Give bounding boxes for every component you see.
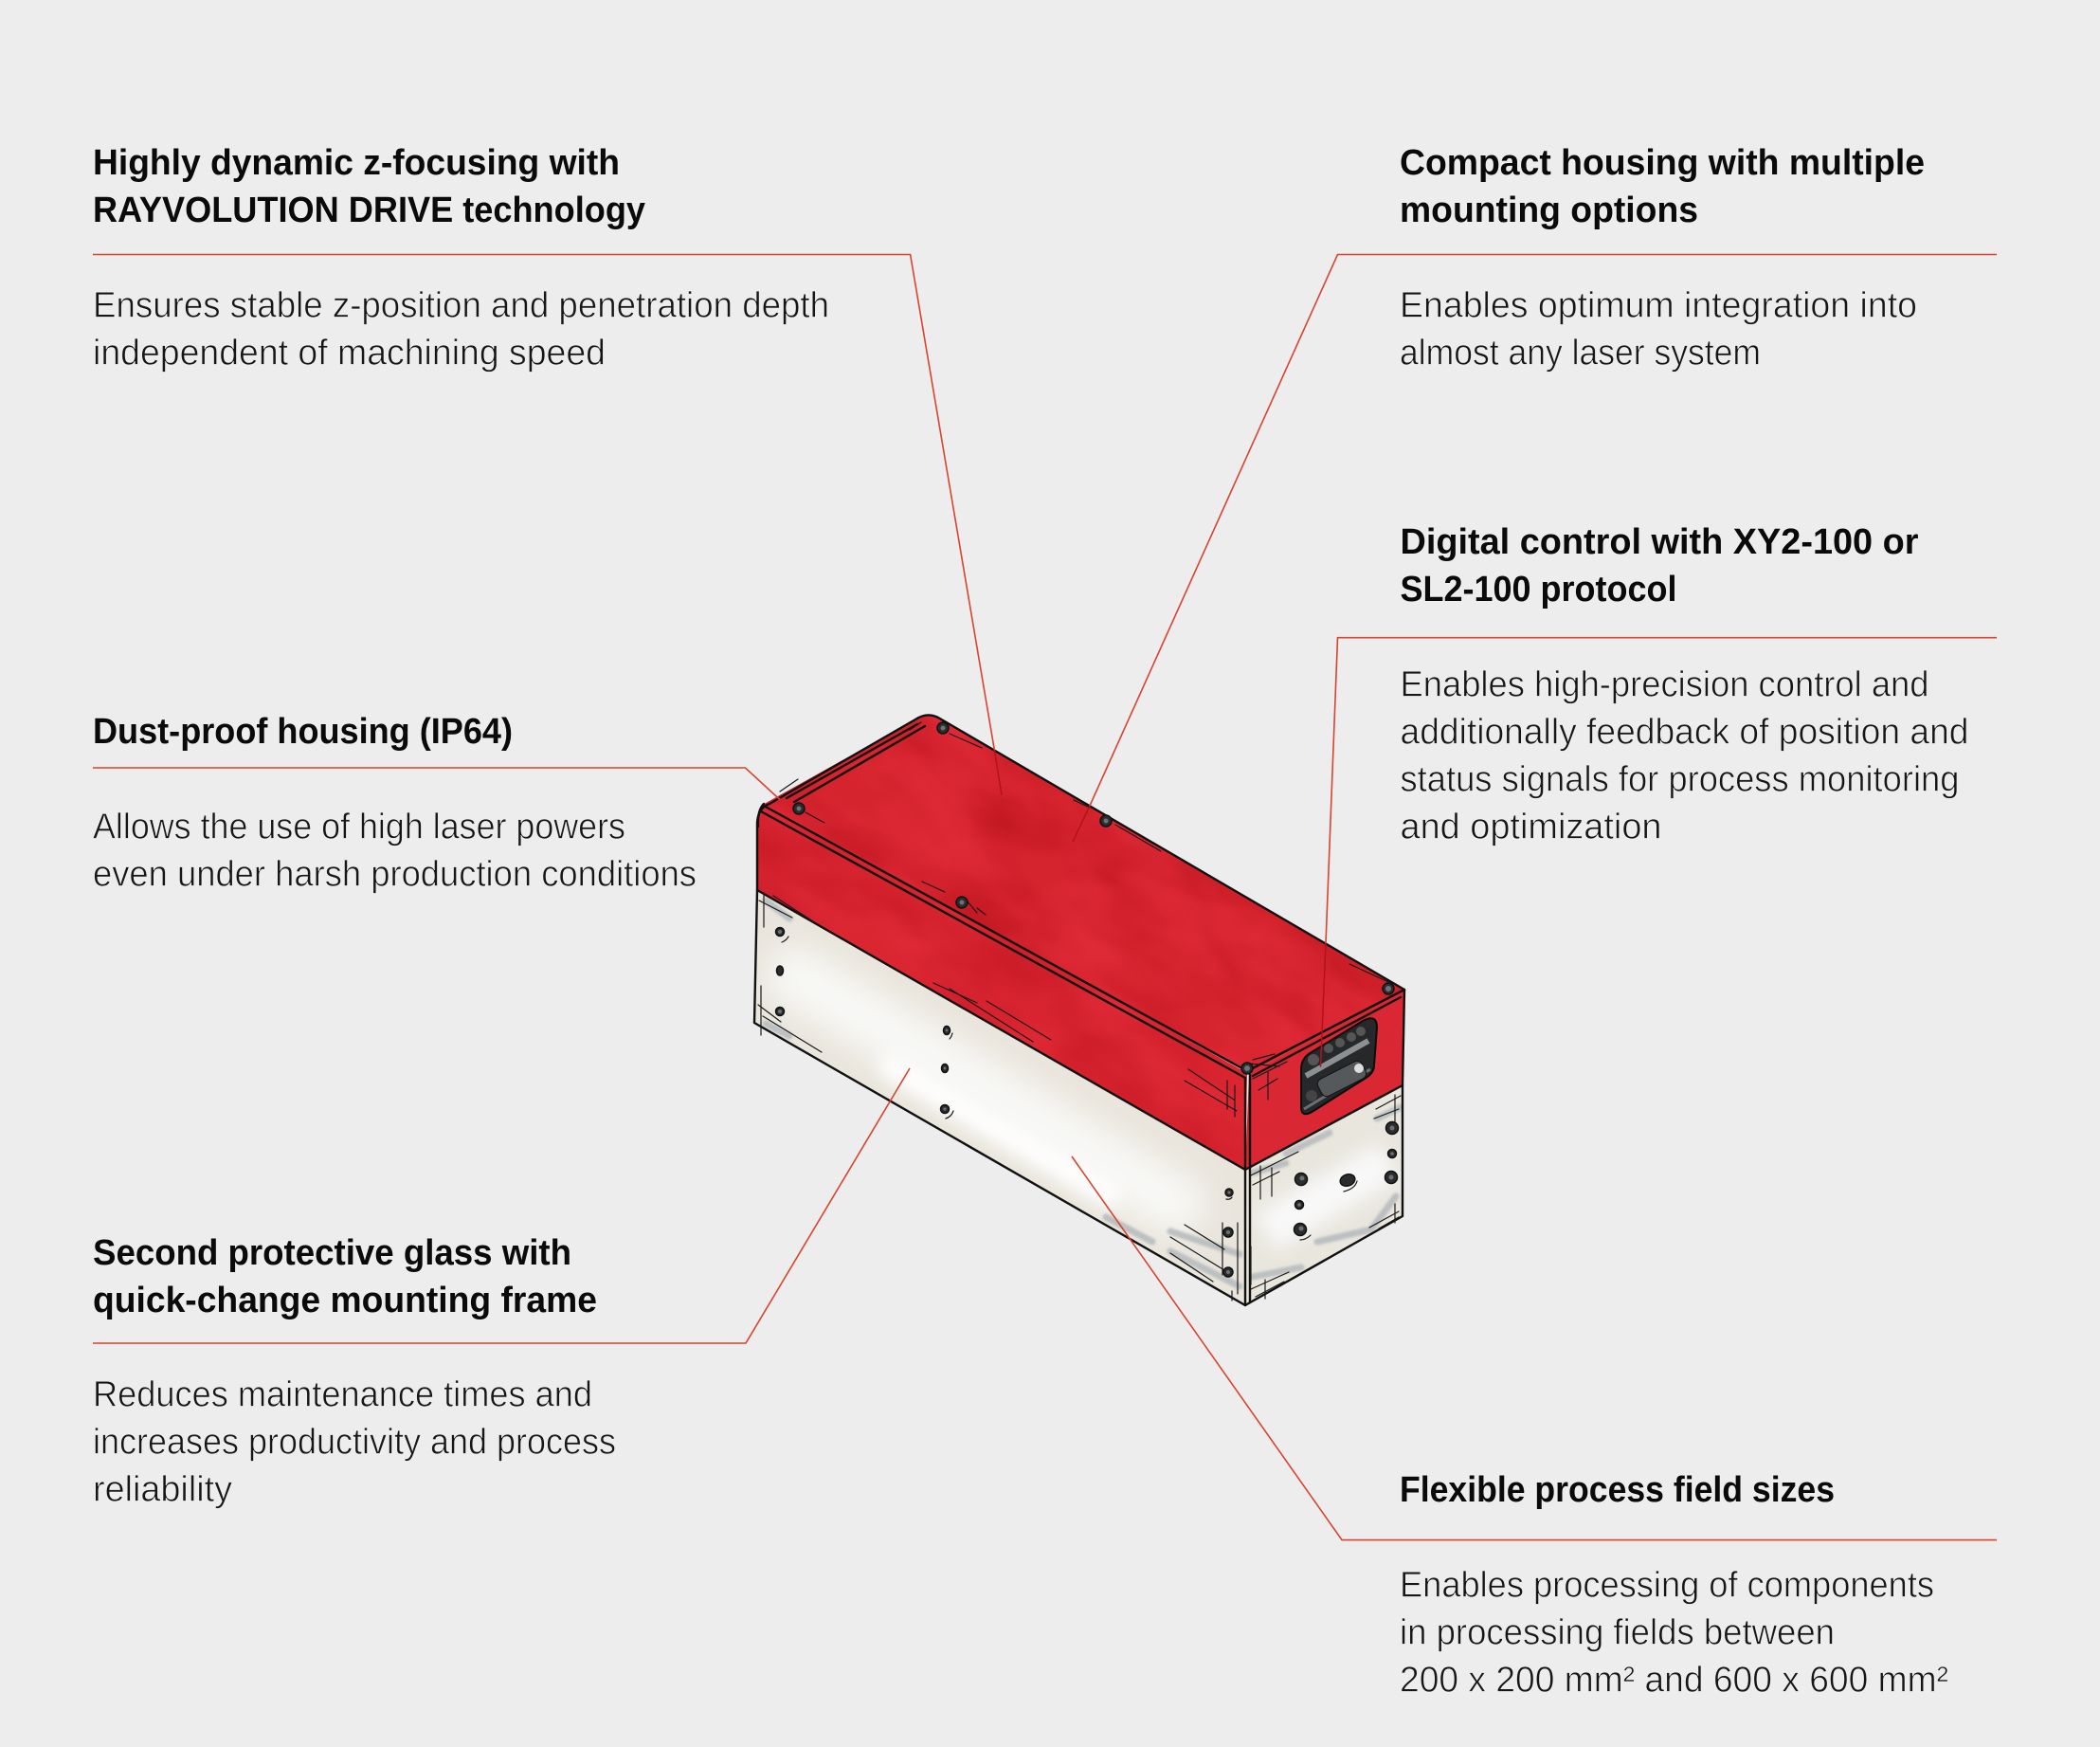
- description: additionally feedback of position and: [1401, 713, 1969, 753]
- heading: SL2-100 protocol: [1401, 570, 1677, 610]
- description: almost any laser system: [1400, 334, 1761, 373]
- heading: [93, 143, 645, 230]
- callout: z-focusing: [93, 143, 1002, 795]
- leader line: [1072, 1156, 1997, 1540]
- callout: dust-proof housing: [93, 712, 780, 895]
- heading: [93, 1233, 597, 1320]
- description: status signals for process monitoring: [1401, 760, 1960, 800]
- description: [1400, 1566, 1948, 1701]
- heading: [1401, 522, 1919, 610]
- sketch hatch marks: [758, 722, 1401, 1301]
- heading: RAYVOLUTION DRIVE technology: [93, 191, 645, 230]
- illustration: laser scan head housing: [752, 714, 1406, 1306]
- description: Reduces maintenance times and: [93, 1374, 592, 1414]
- description: reliability: [93, 1469, 232, 1509]
- heading: Digital control with XY2-100 or: [1401, 522, 1919, 562]
- red right face: [1245, 990, 1404, 1170]
- description: [1400, 286, 1917, 373]
- description: and optimization: [1401, 808, 1662, 847]
- description: Allows the use of high laser powers: [93, 808, 625, 847]
- white right face: [1246, 1088, 1402, 1302]
- leader line: [1073, 254, 1997, 842]
- heading: [1400, 143, 1925, 230]
- leader line: [93, 254, 1002, 795]
- heading: Dust-proof housing (IP64): [93, 712, 513, 752]
- heading: Highly dynamic z-focusing with: [93, 143, 620, 183]
- callout: compact housing: [1073, 143, 1997, 842]
- leader line: [1321, 638, 1997, 1067]
- description: [93, 1374, 616, 1509]
- heading: quick-change mounting frame: [93, 1281, 597, 1320]
- callout: protective glass: [93, 1068, 910, 1509]
- description: [93, 808, 697, 895]
- description: Enables optimum integration into: [1400, 286, 1917, 326]
- callout: digital control: [1321, 522, 1997, 1067]
- description: Enables high-precision control and: [1401, 665, 1929, 705]
- white front face: [749, 882, 1251, 1308]
- screws: [775, 722, 1399, 1277]
- description: 200 x 200 mm² and 600 x 600 mm²: [1400, 1661, 1948, 1701]
- description: in processing fields between: [1400, 1613, 1835, 1653]
- description: independent of machining speed: [93, 334, 606, 373]
- outlines and edges: [754, 715, 1404, 1305]
- description: Enables processing of components: [1400, 1566, 1934, 1606]
- heading: Flexible process field sizes: [1400, 1470, 1835, 1510]
- leader line: [93, 768, 780, 800]
- description: Ensures stable z-position and penetration depth: [93, 286, 829, 326]
- red top face: [761, 717, 1403, 1071]
- heading: Compact housing with multiple: [1400, 143, 1925, 183]
- callout: process field sizes: [1072, 1156, 1997, 1701]
- red front face: [758, 808, 1247, 1168]
- heading: mounting options: [1400, 191, 1698, 230]
- leader line: [93, 1068, 910, 1343]
- description: [93, 286, 829, 373]
- description: increases productivity and process: [93, 1422, 616, 1462]
- connector panel: [1301, 1018, 1377, 1114]
- description: [1401, 665, 1969, 847]
- description: even under harsh production conditions: [93, 855, 697, 895]
- heading: Second protective glass with: [93, 1233, 571, 1273]
